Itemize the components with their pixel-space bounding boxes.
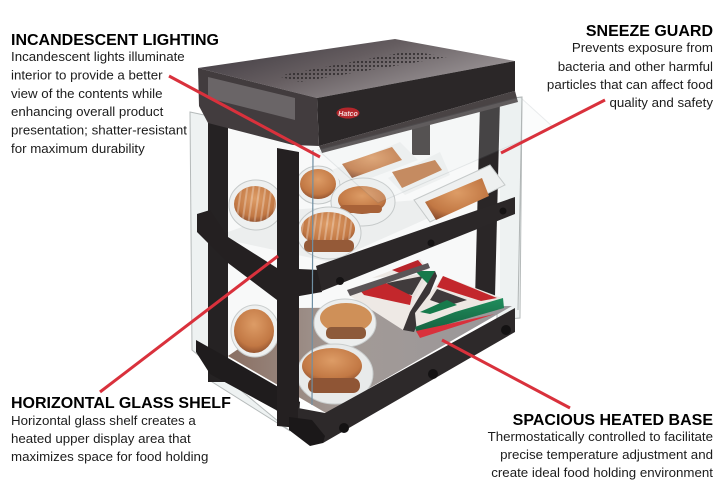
pointer: sneeze guard — [501, 100, 605, 153]
lower left shelf rail — [196, 340, 300, 428]
heated base surface — [228, 306, 512, 413]
heading: SNEEZE GUARD — [586, 23, 713, 40]
front bun in clamshell — [297, 344, 373, 404]
front pastry — [297, 207, 361, 259]
hood front face — [317, 61, 515, 146]
right glass panel — [497, 97, 522, 320]
callout: sneeze guard — [547, 23, 713, 110]
callout: spacious heated base: create ideal food holding environment — [491, 465, 713, 480]
callout: spacious heated base: precise temperature adjustment and — [500, 447, 713, 462]
centre pastry — [331, 178, 395, 226]
back left column — [208, 120, 228, 382]
logo badge — [336, 108, 360, 118]
callout: spacious heated base — [488, 412, 713, 480]
base feet — [339, 325, 511, 433]
base front rail — [298, 308, 515, 443]
pizza boxes — [350, 259, 504, 333]
shelf knobs — [336, 208, 506, 285]
left bun in clamshell — [231, 305, 279, 357]
pointer: incandescent lighting — [169, 76, 320, 157]
left glass panel — [190, 112, 290, 431]
upper pastries — [229, 142, 505, 259]
upper shelf frame — [197, 197, 515, 300]
description: Horizontal glass shelf creates a — [11, 413, 196, 428]
sneeze guard glass — [318, 97, 553, 203]
base corner bracket — [289, 417, 325, 446]
hood left face — [198, 68, 319, 146]
callout: incandescent lighting: interior to provide a better — [11, 68, 163, 82]
callout: horizontal glass shelf: maximizes space for food holding — [11, 449, 208, 464]
product illustration: heated display case — [190, 39, 553, 446]
description: Prevents exposure from — [572, 40, 713, 55]
description: Thermostatically controlled to facilitate — [488, 429, 713, 444]
callout: horizontal glass shelf: heated upper display area that — [11, 431, 191, 446]
description: Incandescent lights illuminate — [11, 49, 185, 64]
middle long pastry — [388, 152, 450, 195]
hood vent perforation — [277, 51, 447, 82]
back right column — [475, 100, 500, 300]
front left column — [277, 148, 299, 428]
shelf underside bar — [347, 263, 430, 296]
shelf front rail — [316, 197, 515, 291]
rear long pastry — [332, 142, 418, 188]
shelf left rail — [197, 210, 322, 300]
left pastry in clamshell — [229, 180, 283, 230]
callout: incandescent lighting: enhancing overall product — [11, 104, 164, 119]
upper shelf glass — [228, 195, 480, 262]
callout: horizontal glass shelf — [11, 395, 231, 464]
middle pizza box — [350, 271, 435, 330]
right glass edge — [518, 97, 522, 310]
front glass edge — [312, 150, 313, 405]
callout: sneeze guard: particles that can affect food — [547, 77, 713, 92]
lower buns — [231, 299, 376, 404]
hood top face — [198, 39, 515, 98]
rear left pastry — [296, 166, 340, 204]
callout: sneeze guard: bacteria and other harmful — [558, 59, 713, 74]
red stripe on base — [416, 314, 495, 338]
heading: INCANDESCENT LIGHTING — [11, 32, 219, 49]
pointer: horizontal glass shelf — [100, 256, 278, 392]
rear bun in clamshell — [314, 299, 376, 347]
callout: incandescent lighting: view of the contents while — [11, 86, 163, 101]
logo badge: Hatco — [338, 111, 358, 118]
back middle column — [412, 125, 430, 155]
callout: incandescent lighting: presentation; shatter-resistant — [11, 122, 187, 138]
back pizza box — [372, 259, 428, 278]
heading: SPACIOUS HEATED BASE — [513, 412, 713, 429]
hood left panel — [208, 77, 295, 120]
callout: incandescent lighting: for maximum durability — [11, 141, 145, 156]
front long pastry — [414, 165, 505, 222]
callout: incandescent lighting — [11, 32, 219, 156]
pointer: spacious heated base — [442, 340, 570, 408]
heading: HORIZONTAL GLASS SHELF — [11, 395, 231, 412]
callout: sneeze guard: quality and safety — [610, 95, 713, 110]
interior back — [228, 105, 500, 360]
hood lower lip — [319, 91, 518, 153]
front pizza box — [415, 276, 503, 333]
